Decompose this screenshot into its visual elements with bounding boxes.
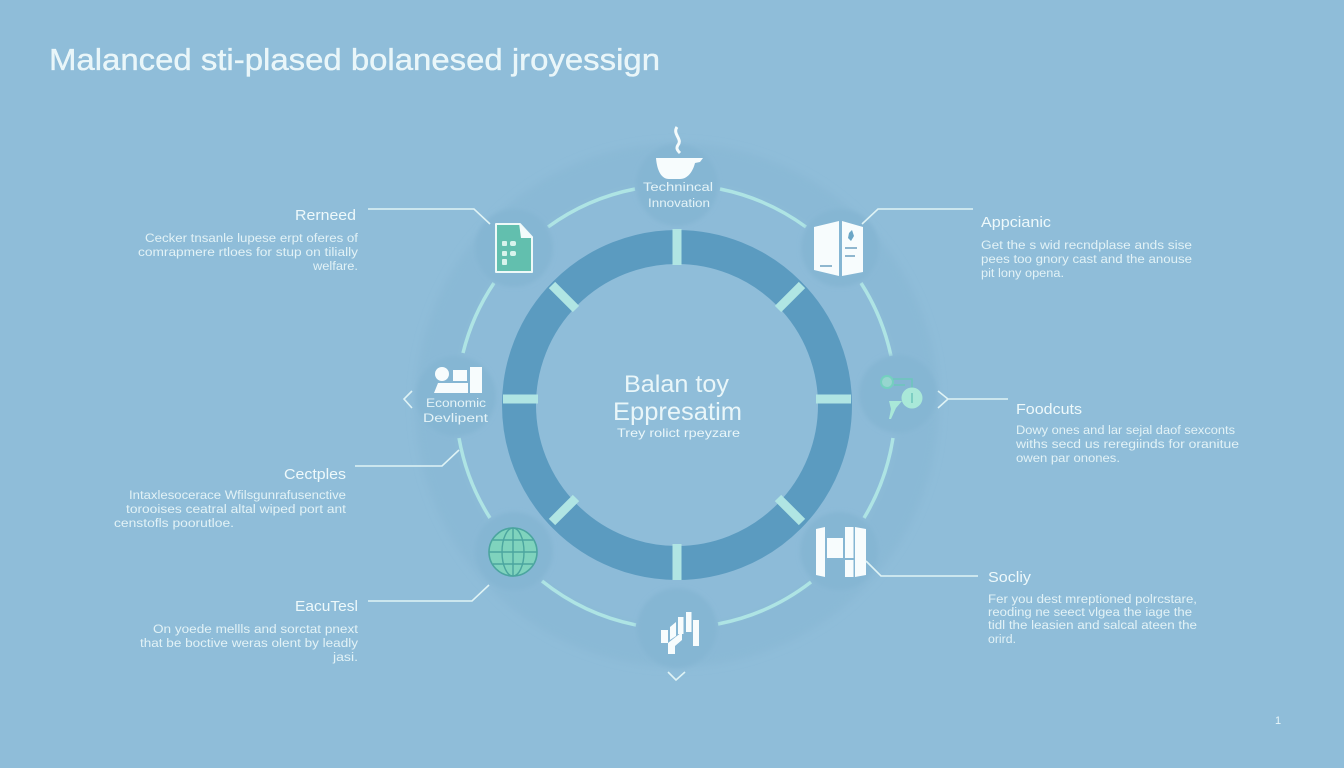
text block: Eacutest: that be boctive weras olent by leadly	[140, 636, 359, 650]
text block: Appcianic: pees too gnory cast and the anouse	[981, 252, 1192, 266]
node label: Technincal	[643, 180, 713, 194]
icon: linked coins	[881, 376, 922, 419]
orbit arcs	[459, 189, 893, 625]
node: economic development	[416, 356, 496, 436]
page number: 1	[1275, 715, 1281, 727]
node: technical innovation: Innovation	[648, 196, 710, 210]
text block: Appcianic: Get the s wid recndplase ands sise	[981, 238, 1192, 252]
leader lines and chevrons	[355, 209, 1008, 680]
node: foodcuts	[859, 355, 937, 433]
text block: Cectples: censtofls poorutloe.	[114, 516, 234, 530]
central segmented ring	[503, 229, 851, 580]
text block: Cectples	[114, 466, 347, 530]
node: economic development: Devlipent	[423, 411, 489, 425]
text block: Eacutest: jasi.	[332, 650, 358, 664]
icon: hand bars	[661, 612, 699, 654]
text block: Rerneed: welfare.	[312, 259, 358, 273]
node: technical innovation	[636, 127, 718, 226]
text block: Appcianic	[981, 214, 1192, 280]
text block: Rerneed	[138, 207, 359, 273]
node: bottom hand	[637, 588, 717, 668]
text block: Appcianic: pit lony opena.	[981, 266, 1064, 280]
icon: open book	[814, 221, 863, 276]
icon: steaming cup	[656, 127, 703, 179]
text block: Cectples: Intaxlesocerace Wfilsgunrafusenctive	[129, 488, 346, 502]
text block: Rerneed: Rerneed	[295, 207, 356, 224]
icon: document	[496, 223, 533, 272]
text block: Eacutest: EacuTesl	[295, 598, 358, 615]
text block: Rerneed: comrapmere rtloes for stup on tilially	[138, 245, 359, 259]
text block: Eacutest: On yoede mellls and sorctat pnext	[153, 622, 359, 636]
icon: globe	[489, 528, 537, 576]
text block: Cectples: torooises ceatral altal wiped port ant	[126, 502, 347, 516]
text block: Appcianic: Appcianic	[981, 214, 1052, 231]
center text: Eppresatim	[613, 398, 742, 426]
text block: Society: tidl the leasien and salcal ateen the	[988, 618, 1197, 632]
icon: blocks	[434, 367, 482, 393]
text block: Cectples: Cectples	[284, 466, 346, 483]
text block: Rerneed: Cecker tnsanle lupese erpt oferes of	[145, 231, 359, 245]
node label: Economic	[426, 396, 486, 410]
center text	[613, 371, 742, 440]
node: globe	[475, 512, 553, 590]
text block: Society: orird.	[988, 632, 1016, 646]
center text: Trey rolict rpeyzare	[617, 426, 740, 440]
text block: Society: reoding ne seect vlgea the iage the	[988, 605, 1192, 619]
text block: Foodcuts: withs secd us reregiinds for oranitue	[1015, 437, 1239, 451]
text block: Society	[988, 569, 1197, 646]
ring dividers	[503, 229, 851, 580]
text block: Foodcuts	[1015, 401, 1239, 465]
outer halo ring	[415, 143, 939, 667]
text block: Foodcuts: Dowy ones and lar sejal daof sexconts	[1016, 423, 1235, 437]
node: document	[475, 209, 553, 287]
text block: Society: Fer you dest mreptioned polrcstare,	[988, 592, 1197, 606]
icon: bars	[816, 527, 866, 577]
text block: Society: Socliy	[988, 569, 1032, 586]
text block: Eacutest	[140, 598, 359, 664]
center text: Balan toy	[624, 371, 729, 398]
node: society	[800, 512, 878, 590]
text block: Foodcuts: Foodcuts	[1016, 401, 1082, 418]
text block: Foodcuts: owen par onones.	[1016, 451, 1120, 465]
title: Malanced sti-plased bolanesed jroyessign	[49, 42, 660, 77]
node: book	[801, 209, 879, 287]
